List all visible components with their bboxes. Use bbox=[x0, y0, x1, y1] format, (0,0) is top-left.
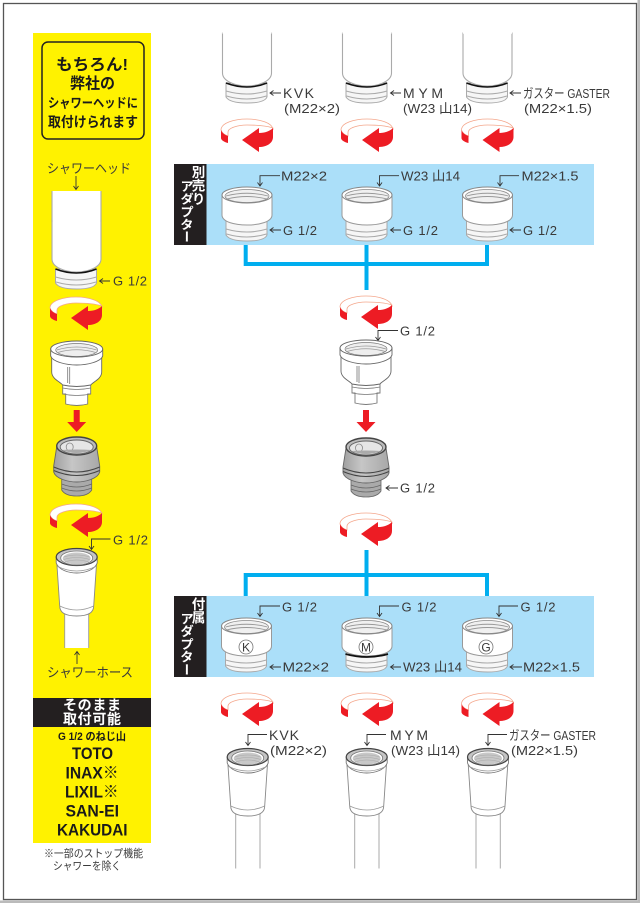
panel: yellow compatibility column bbox=[33, 33, 151, 843]
label: G 1/2 right: G 1/2 bbox=[520, 600, 556, 614]
icon: rotate arrow bbox=[462, 119, 514, 152]
text: compatible brands: KAKUDAI bbox=[57, 820, 128, 840]
icon: adapter M22x2 bbox=[222, 187, 272, 241]
label: GASTER top: (M22×1.5) bbox=[524, 101, 592, 116]
panel: separately sold adapters bbox=[174, 164, 594, 245]
icon: rotate arrow bbox=[341, 693, 393, 726]
text: compatible brands: TOTO bbox=[72, 744, 113, 763]
label: MYM bottom: MYM bbox=[390, 727, 428, 743]
heading: directly installable: 取付可能 bbox=[63, 711, 121, 727]
label: shower head: シャワーヘッド bbox=[47, 161, 131, 176]
label: MYM top: (W23 山14) bbox=[403, 101, 472, 116]
diagram: blue connector top bbox=[246, 245, 487, 290]
icon: KVK shower head bbox=[222, 33, 272, 103]
label: M22x2 bbox=[258, 168, 327, 186]
label: KVK bottom: KVK bbox=[269, 727, 300, 743]
icon: rotate arrow bbox=[221, 693, 273, 726]
icon: gray valve bbox=[54, 437, 100, 496]
icon: GASTER shower head bbox=[463, 33, 512, 103]
label: M22x1.5: M22×1.5 bbox=[523, 660, 580, 674]
text: compatible brands: G 1/2 のねじ山 bbox=[58, 730, 126, 743]
icon: rotate arrow bbox=[341, 119, 393, 152]
icon: gray valve bbox=[343, 438, 389, 497]
label: M22x2: M22×2 bbox=[281, 168, 327, 184]
icon: adapter W23 bbox=[342, 187, 392, 241]
label: shower hose: シャワーホース bbox=[47, 665, 133, 680]
icon: hose KVK bbox=[227, 748, 268, 868]
icon: adapter M: M bbox=[361, 640, 371, 654]
label: MYM bottom: (W23 山14) bbox=[391, 743, 460, 758]
heading: directly installable: そのまま bbox=[63, 697, 121, 713]
diagram: blue connector bottom bbox=[246, 550, 487, 596]
text: compatible brands: LIXIL※ bbox=[65, 782, 118, 802]
label: G 1/2 left: G 1/2 bbox=[283, 223, 317, 238]
footnote bbox=[44, 846, 143, 872]
icon: rotate arrow bbox=[462, 693, 514, 726]
label: G 1/2 middle: G 1/2 bbox=[403, 223, 438, 238]
icon: rotate arrow bbox=[221, 119, 273, 152]
label: KVK bottom: (M22×2) bbox=[270, 743, 327, 758]
label: GASTER bottom: ガスター GASTER bbox=[509, 728, 596, 743]
label: M22x2 bbox=[270, 660, 329, 674]
label: G 1/2 on hose fitting: G 1/2 bbox=[113, 532, 148, 548]
footnote: ※一部のストップ機能 bbox=[44, 846, 143, 860]
text: compatible brands: SAN-EI bbox=[66, 802, 119, 820]
heading: included adapters: アダプター bbox=[178, 612, 194, 676]
label: GASTER bottom bbox=[486, 728, 596, 758]
text: compatible brands: INAX※ bbox=[66, 764, 118, 782]
icon: shower hose fitting bbox=[56, 548, 97, 648]
label: shower hose bbox=[47, 652, 133, 680]
label: G 1/2 right bbox=[496, 600, 556, 616]
label: W23: W23 山14 bbox=[403, 660, 462, 674]
icon: rotate arrow bbox=[50, 297, 102, 330]
icon: adapter K bbox=[222, 618, 272, 672]
callout: compatible with our shower heads: 取付けられます bbox=[48, 114, 138, 130]
heading: included adapters bbox=[174, 596, 206, 677]
icon: MYM shower head bbox=[342, 33, 392, 103]
icon: rotate arrow bbox=[50, 504, 102, 537]
callout: compatible with our shower heads: もちろん! bbox=[56, 56, 128, 74]
label: KVK top: KVK bbox=[283, 85, 315, 101]
icon: hose MYM bbox=[346, 748, 387, 868]
label: W23: W23 山14 bbox=[401, 168, 460, 184]
icon: adapter M22x1.5 bbox=[462, 187, 512, 241]
icon: adapter K: K bbox=[242, 640, 250, 654]
heading: directly installable bbox=[33, 697, 151, 727]
icon: adapter G: G bbox=[481, 640, 491, 654]
heading: separately sold adapters: 別売り bbox=[190, 165, 205, 206]
icon: adapter G bbox=[462, 618, 512, 672]
icon: rotate arrow bbox=[340, 296, 392, 329]
text: compatible brands bbox=[57, 730, 128, 840]
icon: shower head stub bbox=[52, 191, 101, 289]
label: MYM top: MYM bbox=[403, 85, 443, 101]
label: G 1/2 middle coupler bbox=[376, 324, 435, 340]
heading: included adapters: 付属 bbox=[190, 597, 205, 624]
label: G 1/2 left: G 1/2 bbox=[282, 600, 317, 614]
label: G 1/2 right: G 1/2 bbox=[523, 223, 557, 238]
label: W23 bbox=[377, 168, 460, 186]
arrow: down bbox=[67, 410, 86, 432]
label: KVK bottom bbox=[246, 727, 327, 758]
icon: adapter M bbox=[342, 618, 392, 672]
label: G 1/2 left bbox=[258, 600, 317, 616]
heading: separately sold adapters: アダプター bbox=[178, 180, 194, 243]
label: G 1/2 on head: G 1/2 bbox=[113, 274, 147, 288]
label: shower head bbox=[47, 161, 131, 190]
label: MYM bottom bbox=[364, 727, 460, 758]
label: KVK top: (M22×2) bbox=[284, 101, 340, 116]
arrow: down bbox=[356, 410, 376, 432]
panel: included adapters bbox=[174, 596, 594, 677]
label: KVK top bbox=[270, 85, 340, 116]
callout: compatible with our shower heads: 弊社の bbox=[70, 74, 115, 92]
label: M22x1.5: M22×1.5 bbox=[522, 168, 578, 184]
footnote: シャワーを除く bbox=[53, 858, 121, 872]
label: G 1/2 valve: G 1/2 bbox=[400, 480, 435, 496]
label: MYM top bbox=[390, 85, 472, 116]
heading: separately sold adapters bbox=[174, 164, 206, 245]
label: G 1/2 middle coupler: G 1/2 bbox=[400, 324, 435, 338]
label: G 1/2 on hose fitting bbox=[89, 532, 148, 550]
icon: rotate arrow bbox=[340, 513, 392, 546]
label: GASTER top bbox=[510, 86, 610, 116]
icon: coupler bbox=[51, 341, 103, 406]
callout: compatible with our shower heads bbox=[42, 42, 144, 139]
callout: compatible with our shower heads: シャワーヘッドに bbox=[48, 96, 138, 110]
label: GASTER top: ガスター GASTER bbox=[523, 86, 610, 101]
label: M22x2: M22×2 bbox=[282, 660, 329, 674]
label: GASTER bottom: (M22×1.5) bbox=[511, 743, 578, 758]
label: G 1/2 middle: G 1/2 bbox=[402, 600, 436, 614]
icon: hose GASTER bbox=[468, 748, 508, 868]
label: G 1/2 middle bbox=[377, 600, 436, 616]
icon: coupler bbox=[340, 340, 392, 404]
label: M22x1.5 bbox=[498, 168, 578, 186]
